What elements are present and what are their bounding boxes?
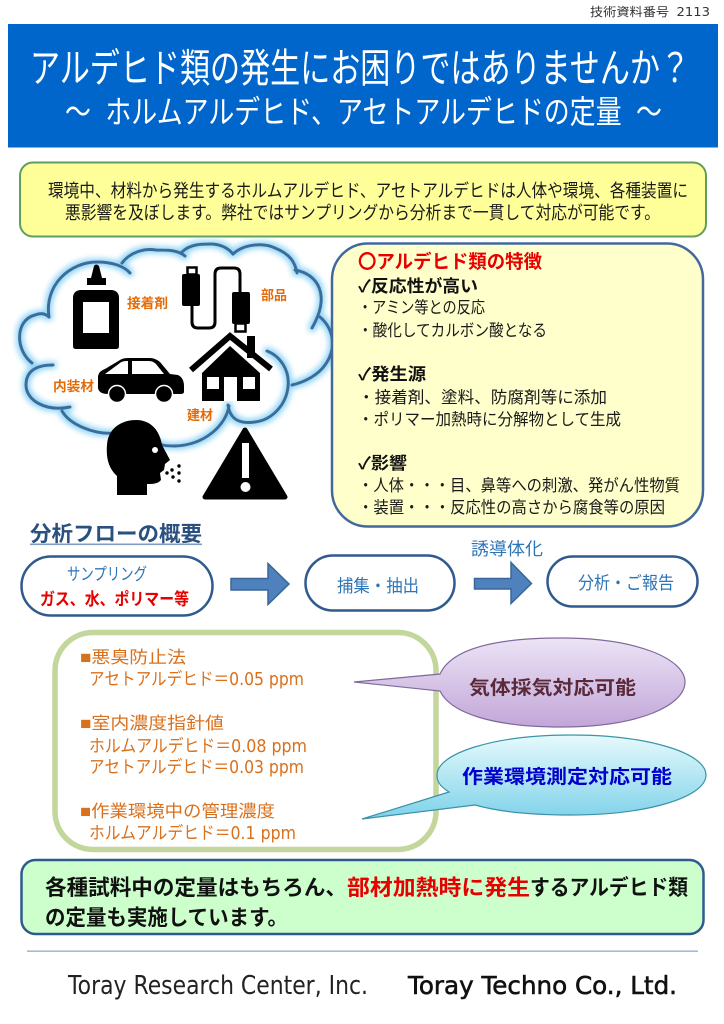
intro box [20,162,706,236]
derivatization label: 誘導体化 [471,539,543,559]
effects line 2: ・装置・・・反応性の高さから腐食等の原因 [358,498,665,517]
logo: Toray Research Center: Toray Research Center, Inc. [67,971,368,1001]
cloud outline [20,244,332,446]
flow step: sampling [22,556,212,616]
icon: house [191,336,271,401]
label: building material: 建材 [187,407,213,423]
panel: aldehyde characteristics [332,244,703,526]
logo: Toray Techno: Toray Techno Co., Ltd. [407,971,677,1000]
title banner [8,24,718,148]
flow step: collection and extraction: 捕集・抽出 [337,576,419,596]
summary line 1 start: 各種試料中の定量はもちろん、 [45,876,347,900]
summary line 1 end: するアルデヒド類 [530,875,688,900]
flow step: analysis and report: 分析・ご報告 [578,573,674,593]
summary highlight: 部材加熱時に発生 [347,876,530,900]
flow step: analysis and report [548,556,698,606]
intro line 2: 悪影響を及ぼします。弊社ではサンプリングから分析まで一貫して対応が可能です。 [65,203,660,223]
reactivity line 1: ・アミン等との反応 [358,298,485,317]
icon: head breathing vapor [107,420,181,495]
callout: gas sampling: 気体採気対応可能 [469,677,636,699]
label: parts: 部品 [261,288,287,303]
panel heading: 〇アルデヒド類の特徴 [358,250,542,273]
callout: work environment measurement: 作業環境測定対応可能 [462,766,672,788]
arrow: extraction to analysis [474,562,532,604]
illustration: emission cloud with icons [20,244,332,497]
subheading: reactivity: ✓反応性が高い [358,276,478,296]
panel: regulatory values [55,632,436,850]
sources line 2: ・ポリマー加熱時に分解物として生成 [358,410,621,429]
arrow: sampling to extraction [231,564,289,604]
workplace control heading: ■作業環境中の管理濃度 [80,802,275,821]
subheading: effects: ✓影響 [358,453,407,473]
sample types: ガス、水、ポリマー等 [40,589,189,609]
sources line 1: ・接着剤、塗料、防腐剤等に添加 [358,388,607,407]
formaldehyde workplace value: ホルムアルデヒド＝0.1 ppm [89,823,296,844]
callout: gas sampling [354,638,685,727]
effects line 1: ・人体・・・目、鼻等への刺激、発がん性物質 [358,476,680,495]
offensive odor law heading: ■悪臭防止法 [80,648,186,667]
sampling label: サンプリング [67,565,147,584]
acetaldehyde indoor value: アセトアルデヒド＝0.03 ppm [89,757,304,778]
document number: 技術資料番号 2113 [590,4,710,19]
label: adhesive: 接着剤 [127,295,168,311]
label: interior material: 内装材 [53,378,95,394]
heading: analysis flow: 分析フローの概要 [30,523,202,546]
icon: cable [182,268,250,332]
icon: warning triangle [205,430,285,497]
summary line 2: の定量も実施しています。 [45,906,288,930]
acetaldehyde value: アセトアルデヒド＝0.05 ppm [89,669,304,690]
flow step: collection and extraction [306,556,454,610]
summary box [22,860,704,934]
formaldehyde value: ホルムアルデヒド＝0.08 ppm [89,736,307,757]
indoor guideline heading: ■室内濃度指針値 [80,714,224,733]
subheading: sources: ✓発生源 [358,365,426,384]
icon: adhesive bottle [73,264,119,349]
callout: work environment measurement [362,735,706,819]
reactivity line 2: ・酸化してカルボン酸となる [358,321,547,340]
icon: car [98,358,184,402]
